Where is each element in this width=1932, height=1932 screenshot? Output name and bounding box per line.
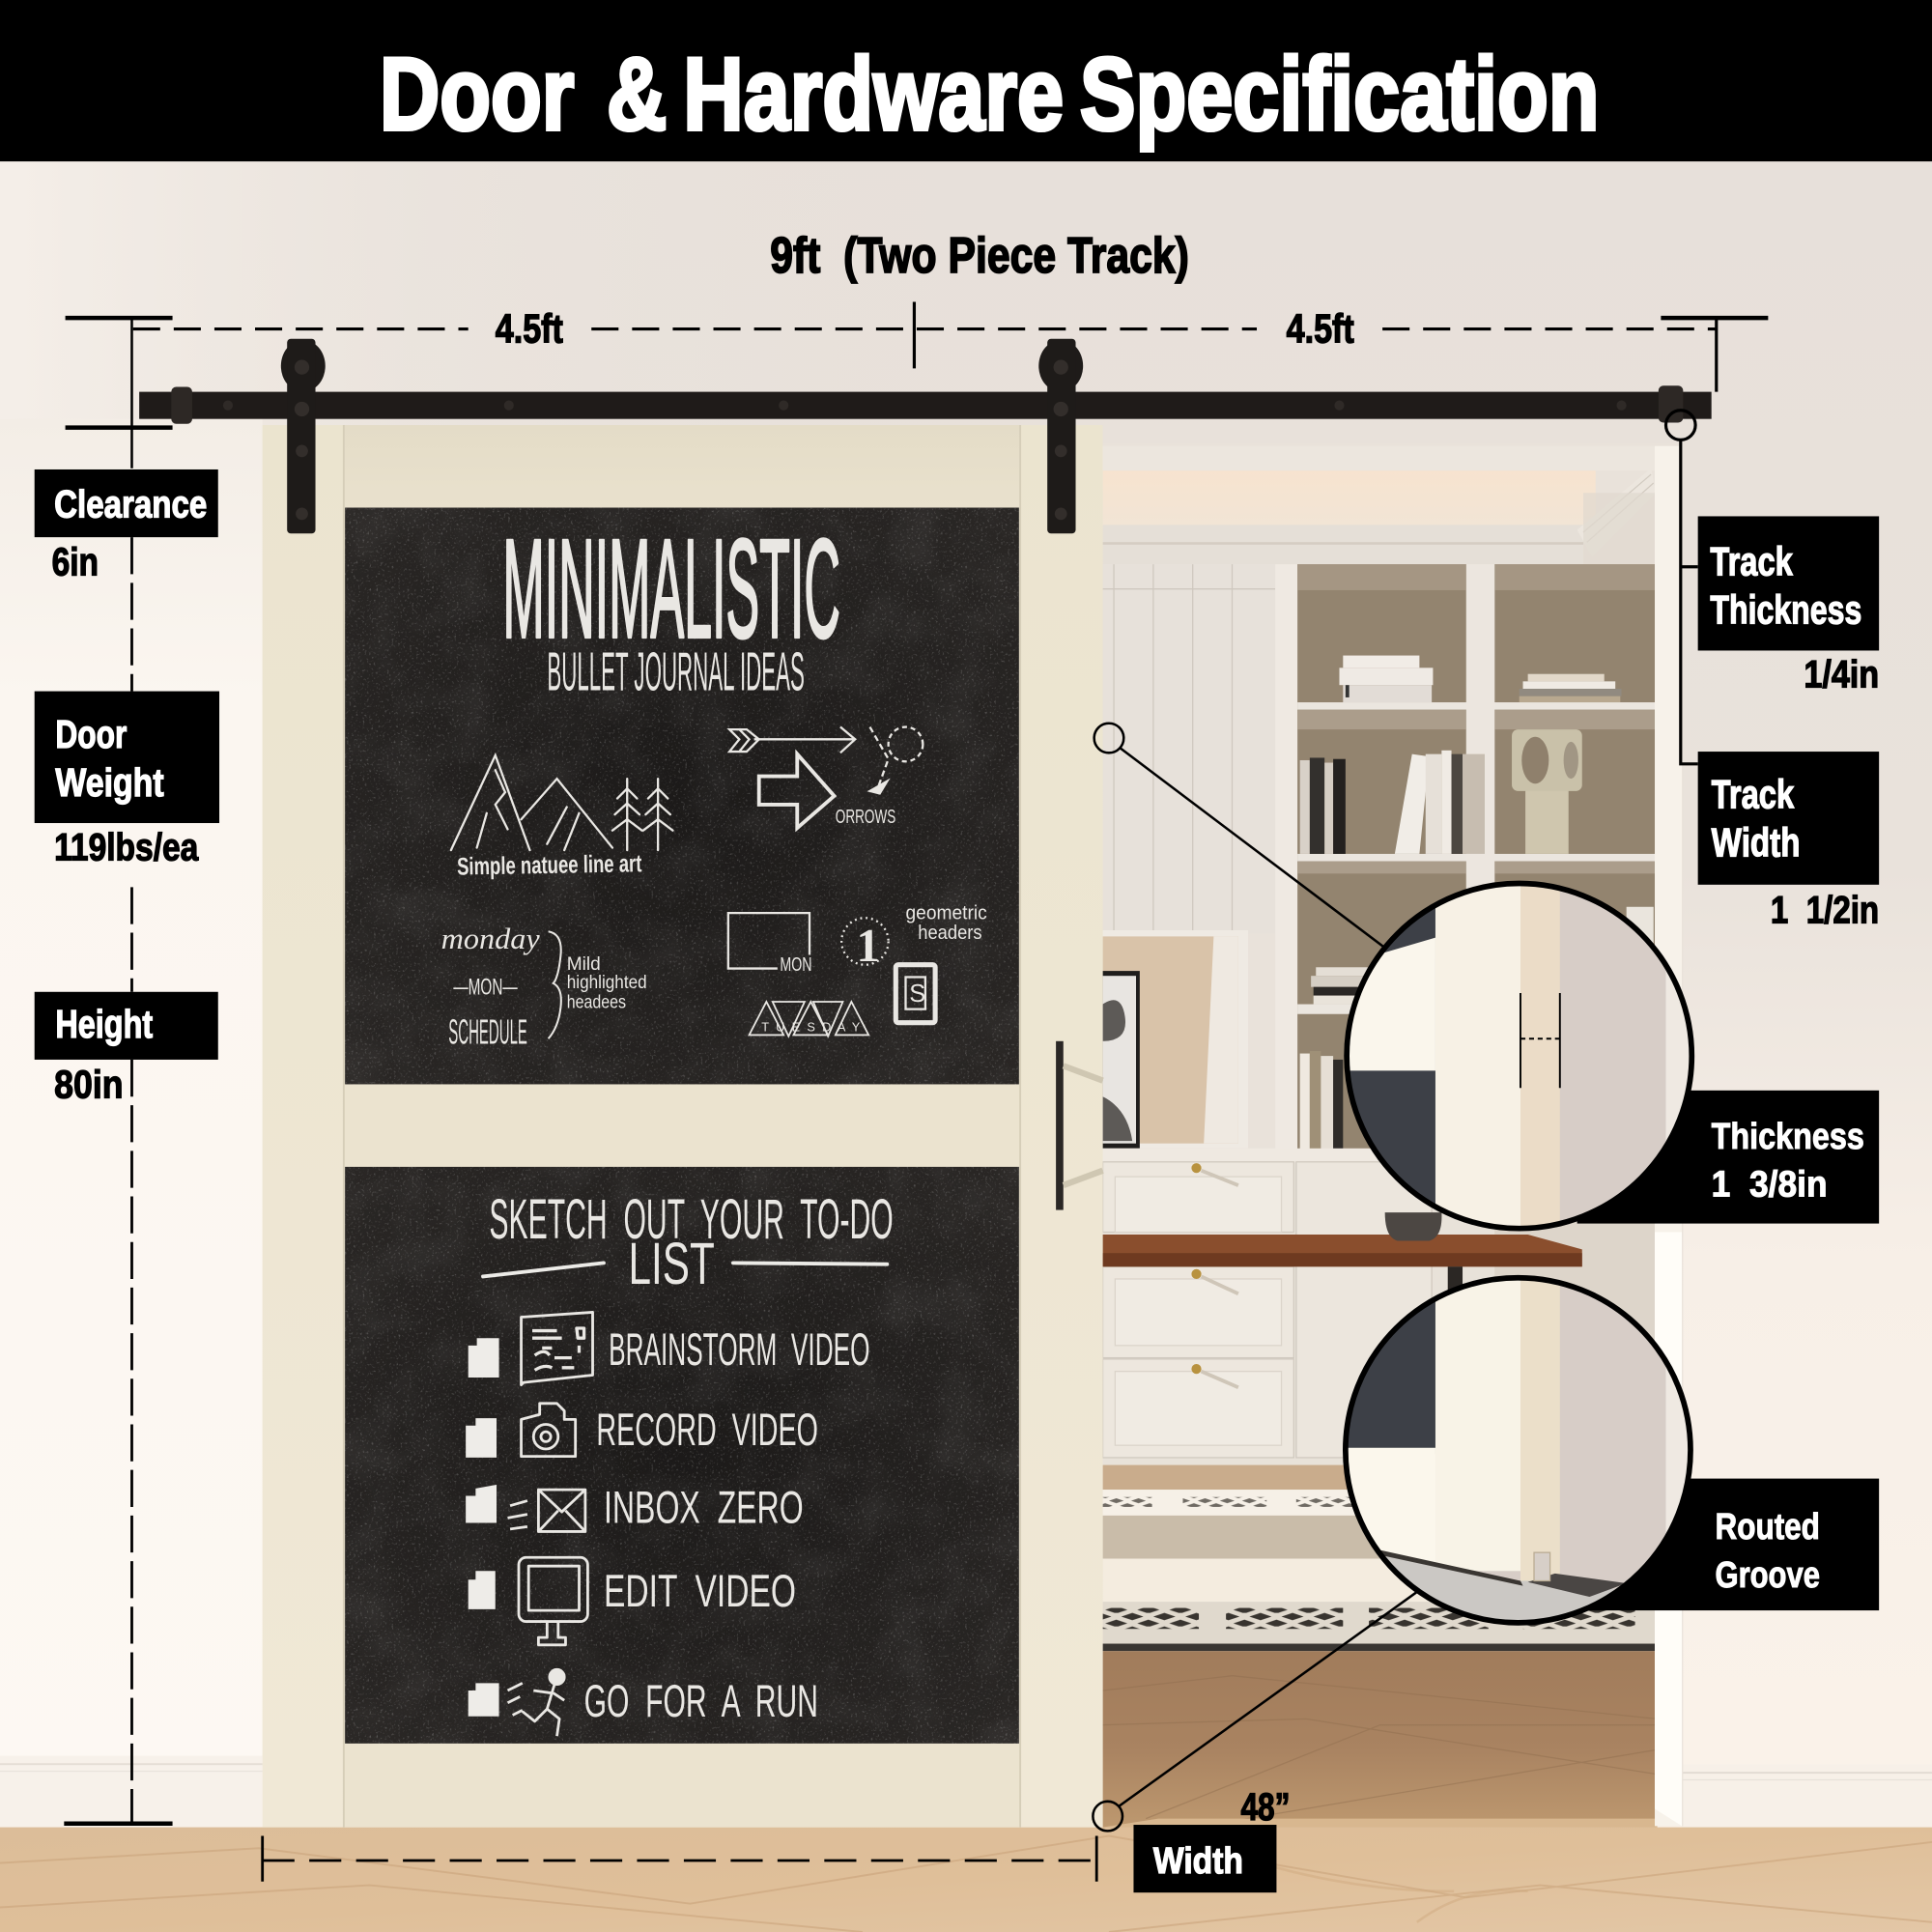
- door weight label: Door: [55, 712, 127, 756]
- chalk mon: —MON—: [453, 974, 518, 1000]
- chalk list heading: SKETCH OUT YOUR TO-DO: [489, 1188, 894, 1251]
- artwork frames: [1103, 930, 1248, 1149]
- width value: 48”: [1240, 1786, 1290, 1829]
- chalk geometric text: geometric: [906, 903, 987, 924]
- list items: GO FOR A RUN: [584, 1676, 818, 1727]
- height label: [35, 992, 218, 1060]
- magnifier: routed groove detail: [1343, 1275, 1703, 1633]
- chalk brace: [549, 931, 561, 1038]
- chalk geometric headers: [728, 913, 935, 1037]
- soffit light: [1084, 446, 1658, 529]
- width label: [1133, 1825, 1276, 1892]
- track length heading: 9ft (Two Piece Track): [770, 228, 1189, 284]
- thickness callout leader: [1094, 724, 1386, 949]
- door width dimension: [263, 1836, 1096, 1882]
- chalk geometric text: headers: [918, 923, 982, 944]
- door weight value: 119lbs/ea: [54, 826, 199, 868]
- chalk geometric text: S: [909, 980, 925, 1008]
- thickness label: 1 3/8in: [1712, 1164, 1828, 1206]
- chalk geometric text: MON: [780, 954, 812, 976]
- routed groove label: Groove: [1716, 1554, 1820, 1596]
- chalk caption: arrows: ORROWS: [836, 807, 895, 828]
- list items: EDIT VIDEO: [604, 1566, 796, 1617]
- left 4.5ft label: 4.5ft: [496, 306, 563, 352]
- track width dimension lines: [64, 301, 1768, 1824]
- height label: Height: [55, 1002, 153, 1046]
- height value: 80in: [54, 1062, 124, 1106]
- chalk arrows: [729, 727, 923, 828]
- routed groove label: [1577, 1479, 1879, 1610]
- thickness dimension mark: [1520, 993, 1560, 1088]
- list items: INBOX ZERO: [604, 1483, 804, 1534]
- upper chalkboard: BULLET JOURNAL IDEAS: [547, 640, 805, 701]
- upper chalkboard: SCHEDULE: [448, 1012, 527, 1051]
- track thickness label: Thickness: [1710, 586, 1861, 632]
- track thickness label: [1698, 516, 1879, 650]
- track thickness label: Track: [1710, 539, 1793, 584]
- chalk mountains: [451, 755, 672, 850]
- list items: BRAINSTORM VIDEO: [609, 1324, 870, 1376]
- chalk monday: monday: [441, 923, 540, 955]
- table and cup: [1103, 1212, 1582, 1303]
- list items: [584, 1324, 870, 1727]
- books: [1300, 656, 1654, 1150]
- thickness label: Thickness: [1712, 1116, 1864, 1157]
- track width label: Track: [1712, 772, 1795, 817]
- door weight label: Weight: [55, 760, 164, 805]
- lower chalkboard: [345, 1167, 1019, 1744]
- sliding track rail: [139, 385, 1712, 424]
- chalk geometric text: T U E S D A Y: [761, 1020, 861, 1035]
- clearance label: [35, 469, 218, 537]
- width label: Width: [1153, 1840, 1243, 1882]
- track width label: [1698, 752, 1879, 885]
- door frame: [263, 425, 1103, 1828]
- wainscot wall: [1103, 564, 1275, 934]
- list items: RECORD VIDEO: [596, 1405, 818, 1456]
- chalk mild highlighted headers: [567, 954, 647, 1012]
- track callout leader: [1665, 411, 1698, 764]
- track stops: [171, 385, 1683, 424]
- upper chalkboard: MINIMALISTIC: [502, 509, 840, 667]
- chalk caption: nature: Simple natuee line art: [457, 850, 642, 881]
- upper chalkboard: [345, 508, 1019, 1084]
- track thickness value: 1/4in: [1804, 654, 1879, 696]
- sculpture: [1512, 729, 1582, 854]
- chalk geometric text: [761, 903, 987, 1035]
- floor: [0, 1828, 1932, 1932]
- clearance value: 6in: [52, 540, 99, 584]
- chalk mild highlighted headers: Mild: [567, 954, 601, 975]
- crown molding: [1103, 469, 1658, 564]
- list icons: [508, 1312, 593, 1736]
- chalk list rules: [483, 1263, 887, 1276]
- interior floor: [1103, 1651, 1658, 1828]
- track width label: Width: [1712, 819, 1801, 865]
- baseboards: [0, 1756, 1932, 1828]
- magnifier: door thickness detail: [1343, 881, 1703, 1238]
- door weight label: [35, 692, 219, 823]
- chalk mild highlighted headers: headees: [567, 992, 626, 1012]
- title banner: [0, 0, 1932, 161]
- bookcase: [1275, 564, 1658, 1155]
- thickness label: [1577, 1091, 1879, 1224]
- groove callout leader: [1093, 1592, 1417, 1831]
- rug: [1103, 1465, 1658, 1651]
- checkboxes: [466, 1338, 499, 1717]
- cabinet drawers: [1103, 1149, 1658, 1466]
- chalk mild highlighted headers: highlighted: [567, 973, 647, 993]
- routed groove label: Routed: [1716, 1506, 1820, 1548]
- right door jamb: [1655, 446, 1682, 1826]
- chalk geometric text: 1: [856, 921, 880, 972]
- track width value: 1 1/2in: [1771, 889, 1879, 931]
- door handle: [1056, 1041, 1103, 1210]
- interior room through door opening: [1084, 443, 1683, 1828]
- right 4.5ft label: 4.5ft: [1287, 306, 1354, 352]
- title: Door & Hardware Specification: [380, 36, 1600, 152]
- chalk list word: LIST: [629, 1231, 715, 1296]
- clearance label: Clearance: [54, 484, 207, 526]
- left door hanger: [281, 339, 326, 533]
- right door hanger: [1038, 339, 1083, 533]
- barn door: [263, 425, 1103, 1828]
